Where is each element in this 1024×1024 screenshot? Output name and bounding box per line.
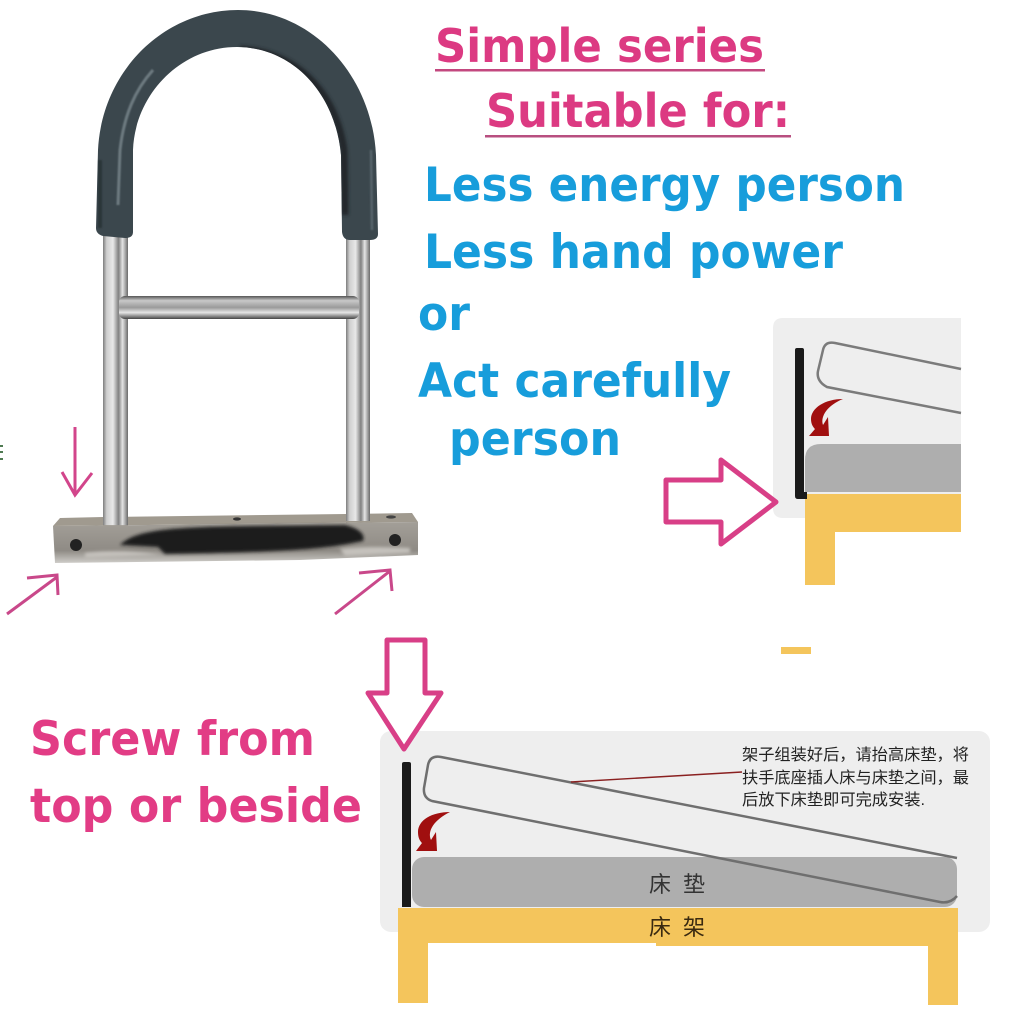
pointer line bbox=[571, 772, 742, 782]
left pole bbox=[103, 232, 128, 527]
small tilted mattress outline bbox=[818, 343, 961, 413]
text: suitable persons list: Less energy person bbox=[424, 158, 905, 213]
edge mark bbox=[0, 446, 3, 459]
label: bed frame: 床 架 bbox=[649, 915, 705, 940]
small bed frame bbox=[805, 494, 961, 585]
text: suitable persons list: Act carefully bbox=[418, 354, 731, 409]
installation note: 扶手底座插人床与床垫之间，最 bbox=[742, 769, 969, 787]
label: mattress: 床 垫 bbox=[649, 872, 705, 897]
base front face bbox=[53, 522, 418, 563]
right pole bbox=[346, 234, 370, 524]
icon: bed rail product photo bbox=[53, 5, 418, 563]
heading: Screw from top or beside bbox=[30, 712, 362, 834]
arrow: hollow down arrow bbox=[368, 640, 441, 749]
screw hole right bbox=[389, 534, 401, 546]
installation note bbox=[742, 746, 969, 809]
arrow: right screw bbox=[335, 570, 392, 614]
arrow: left screw bbox=[7, 575, 58, 614]
large red curved arrow bbox=[416, 812, 450, 851]
arrow: top screw bbox=[62, 427, 92, 495]
panel: large bed diagram bbox=[380, 731, 990, 1005]
heading: Screw from top or beside: top or beside bbox=[30, 779, 362, 834]
large tilted mattress outline bbox=[424, 757, 957, 902]
screw hole left bbox=[70, 539, 82, 551]
text: suitable persons list: or bbox=[418, 287, 471, 342]
arrow: hollow right arrow bbox=[666, 460, 776, 544]
installation note: 后放下床垫即可完成安装. bbox=[742, 791, 925, 809]
installation note: 架子组装好后，请抬高床垫，将 bbox=[742, 746, 969, 764]
base top face bbox=[53, 513, 418, 526]
base dark reflection bbox=[120, 525, 364, 554]
heading: Simple series: Simple series bbox=[435, 19, 764, 73]
small mattress bbox=[805, 444, 961, 492]
large rail bbox=[402, 762, 411, 907]
crossbar bbox=[119, 296, 359, 319]
text: suitable persons list: Less hand power bbox=[424, 225, 844, 280]
panel: small bed diagram bbox=[773, 318, 961, 585]
padded grip bbox=[90, 5, 385, 245]
heading: Suitable for: Suitable for: bbox=[486, 84, 790, 138]
text: suitable persons list: person bbox=[449, 412, 621, 467]
small rail bbox=[795, 348, 807, 499]
large mattress bbox=[412, 857, 957, 907]
large bed frame bbox=[398, 908, 958, 1005]
yellow dash bbox=[781, 647, 811, 654]
small red curved arrow bbox=[809, 399, 843, 436]
heading: Screw from top or beside: Screw from bbox=[30, 712, 315, 767]
text: suitable persons list bbox=[418, 158, 905, 467]
